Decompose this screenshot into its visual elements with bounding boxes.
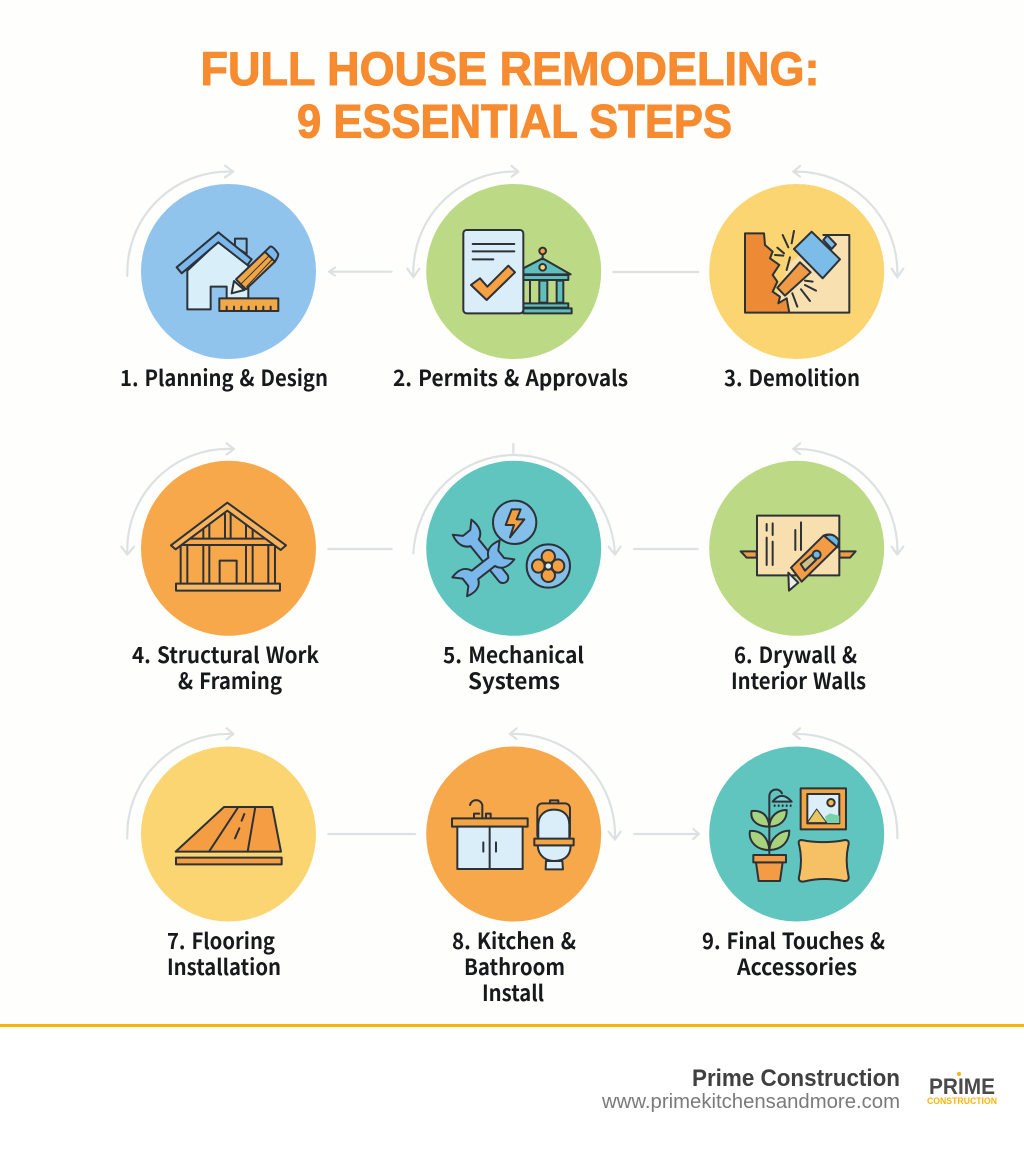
arc arrow: step 6 (793, 443, 903, 555)
title (200, 42, 820, 148)
arc arrow: step 1 (127, 166, 233, 276)
label: step 2: 2. Permits & Approvals (393, 361, 628, 393)
arc arrow: step 7 (127, 728, 233, 838)
circle: step 8 (426, 746, 601, 922)
icon: plant, picture frame and pillow (750, 788, 849, 882)
circle: step 2 (426, 184, 601, 359)
icon: wrenches, lightning bolt and fan (452, 501, 570, 597)
label: step 3: 3. Demolition (724, 361, 860, 393)
panel: step 3 demolition (709, 166, 903, 393)
label: step 9 (702, 924, 885, 982)
title: 9 ESSENTIAL STEPS (297, 94, 732, 148)
label: step 4: & Framing (178, 664, 282, 696)
panel: step 6 drywall and interior walls (709, 443, 903, 696)
panel: step 1 planning and design (120, 166, 328, 393)
label: step 4 (132, 638, 320, 696)
circle: step 7 (141, 746, 316, 922)
label: step 5: Systems (468, 664, 560, 696)
arc arrow: step 2 (407, 166, 518, 277)
label: step 8 (452, 924, 576, 1008)
logo (927, 1072, 997, 1107)
title: FULL HOUSE REMODELING: (200, 42, 820, 95)
icon: vanity sink and toilet (452, 800, 574, 869)
panel: step 2 permits and approvals (393, 166, 628, 393)
circle: step 6 (709, 461, 884, 636)
icon: sledgehammer breaking wall (745, 231, 849, 313)
panel: step 7 flooring installation (127, 728, 316, 982)
logo: PRIME (929, 1074, 995, 1099)
connector arrow: step 7 to step 8 (328, 831, 415, 837)
label: step 5 (443, 638, 584, 696)
website: www.primekitchensandmore.com (601, 1091, 900, 1113)
label: step 9: Accessories (736, 950, 857, 982)
label: step 8: Bathroom (464, 950, 565, 982)
footer background (0, 1025, 1024, 1154)
panel: step 8 kitchen and bathroom install (426, 728, 621, 1008)
company name: Prime Construction (692, 1065, 900, 1092)
label: step 7: 7. Flooring (167, 924, 275, 956)
circle: step 5 (426, 461, 601, 636)
label: step 7 (167, 924, 281, 982)
label: step 5: 5. Mechanical (443, 638, 584, 670)
icon: house with pencil and ruler (177, 232, 278, 311)
panel: step 9 final touches and accessories (702, 728, 897, 982)
label: step 1: 1. Planning & Design (120, 361, 328, 393)
label: step 8: Install (482, 976, 544, 1008)
connector arrow: step 2 to step 3 (613, 269, 698, 275)
logo: CONSTRUCTION (927, 1096, 997, 1107)
label: step 7: Installation (167, 950, 281, 982)
arc arrow: step 5 (413, 444, 621, 555)
connector arrow: step 4 to step 5 (328, 546, 392, 552)
label: step 4: 4. Structural Work (132, 638, 320, 670)
panel: step 4 structural work and framing (121, 443, 320, 696)
panel: step 5 mechanical systems (413, 444, 621, 696)
icon: permit document and government building (463, 230, 572, 313)
connector arrow: step 5 to step 6 (634, 546, 698, 552)
arc arrow: step 8 (510, 728, 621, 840)
arc arrow: step 9 (793, 728, 897, 838)
icon: floor planks (176, 807, 282, 864)
icon: drywall board and utility knife (741, 516, 856, 591)
connector arrow: step 2 to step 1 (329, 268, 392, 276)
label: step 9: 9. Final Touches & (702, 924, 885, 956)
arc arrow: step 3 (793, 166, 903, 277)
circle: step 3 (709, 184, 884, 359)
label: step 6: Interior Walls (731, 664, 866, 696)
connector arrow: step 8 to step 9 (634, 829, 699, 839)
icon: house framing (171, 503, 286, 591)
circle: step 9 (709, 746, 884, 922)
label: step 6: 6. Drywall & (734, 638, 857, 670)
arc arrow: step 4 (121, 443, 234, 555)
footer panel (0, 1024, 1024, 1154)
circle: step 1 (141, 184, 316, 359)
footer rule (0, 1024, 1024, 1027)
label: step 6 (731, 638, 866, 696)
label: step 8: 8. Kitchen & (452, 924, 576, 956)
circle: step 4 (141, 461, 316, 636)
